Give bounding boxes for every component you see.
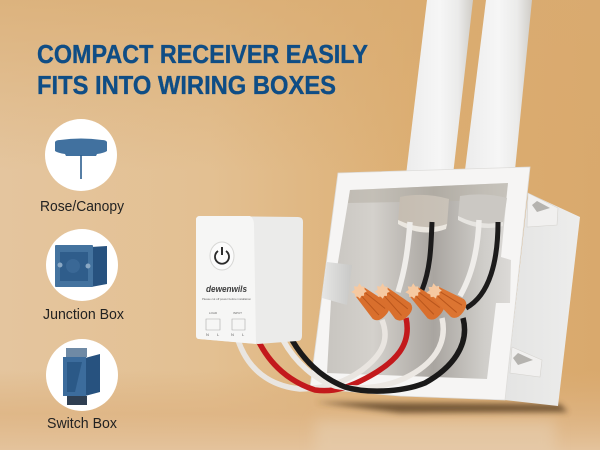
receiver small print: L xyxy=(242,332,245,337)
box knockout tab xyxy=(322,262,352,305)
wire nuts xyxy=(346,278,470,324)
icon: rose canopy xyxy=(45,119,117,191)
lower wires to receiver xyxy=(238,318,465,391)
power button xyxy=(210,242,234,270)
icon: switch box xyxy=(46,339,118,411)
icon: junction box xyxy=(46,229,118,301)
receiver module xyxy=(196,216,303,344)
wire nut 1 xyxy=(346,278,393,324)
receiver small print: N xyxy=(206,332,209,337)
wiring box xyxy=(238,167,580,406)
label: Rose/Canopy: Rose/Canopy xyxy=(40,198,124,215)
receiver small print: N xyxy=(231,332,234,337)
receiver body xyxy=(196,216,303,344)
grommet right xyxy=(458,194,507,228)
upper wires xyxy=(398,220,498,308)
box opening xyxy=(327,183,511,379)
title xyxy=(37,39,368,100)
label: Switch Box: Switch Box xyxy=(47,415,117,432)
title: FITS INTO WIRING BOXES xyxy=(37,70,336,100)
receiver small print: INPUT xyxy=(233,311,242,315)
junction box item xyxy=(43,229,124,323)
receiver front xyxy=(196,216,256,344)
box front frame xyxy=(310,167,530,400)
receiver small print xyxy=(202,297,251,337)
label: Junction Box: Junction Box xyxy=(43,306,124,323)
switch box item xyxy=(46,339,118,432)
rose/canopy item xyxy=(40,119,124,215)
box side clips xyxy=(510,193,558,377)
title: COMPACT RECEIVER EASILY xyxy=(37,39,368,69)
wire nut 2 xyxy=(369,278,416,324)
receiver wiring diagram xyxy=(206,319,245,330)
brand name: dewenwils xyxy=(206,284,247,294)
box side xyxy=(505,193,580,406)
wire nut 3 xyxy=(401,278,447,323)
receiver small print: LOAD xyxy=(209,311,218,315)
wire nut 4 xyxy=(422,278,470,321)
receiver small print: Please cut off power before installation xyxy=(202,297,251,301)
grommet left xyxy=(398,195,449,233)
receiver small print: L xyxy=(217,332,220,337)
conduit pipes xyxy=(406,0,532,175)
